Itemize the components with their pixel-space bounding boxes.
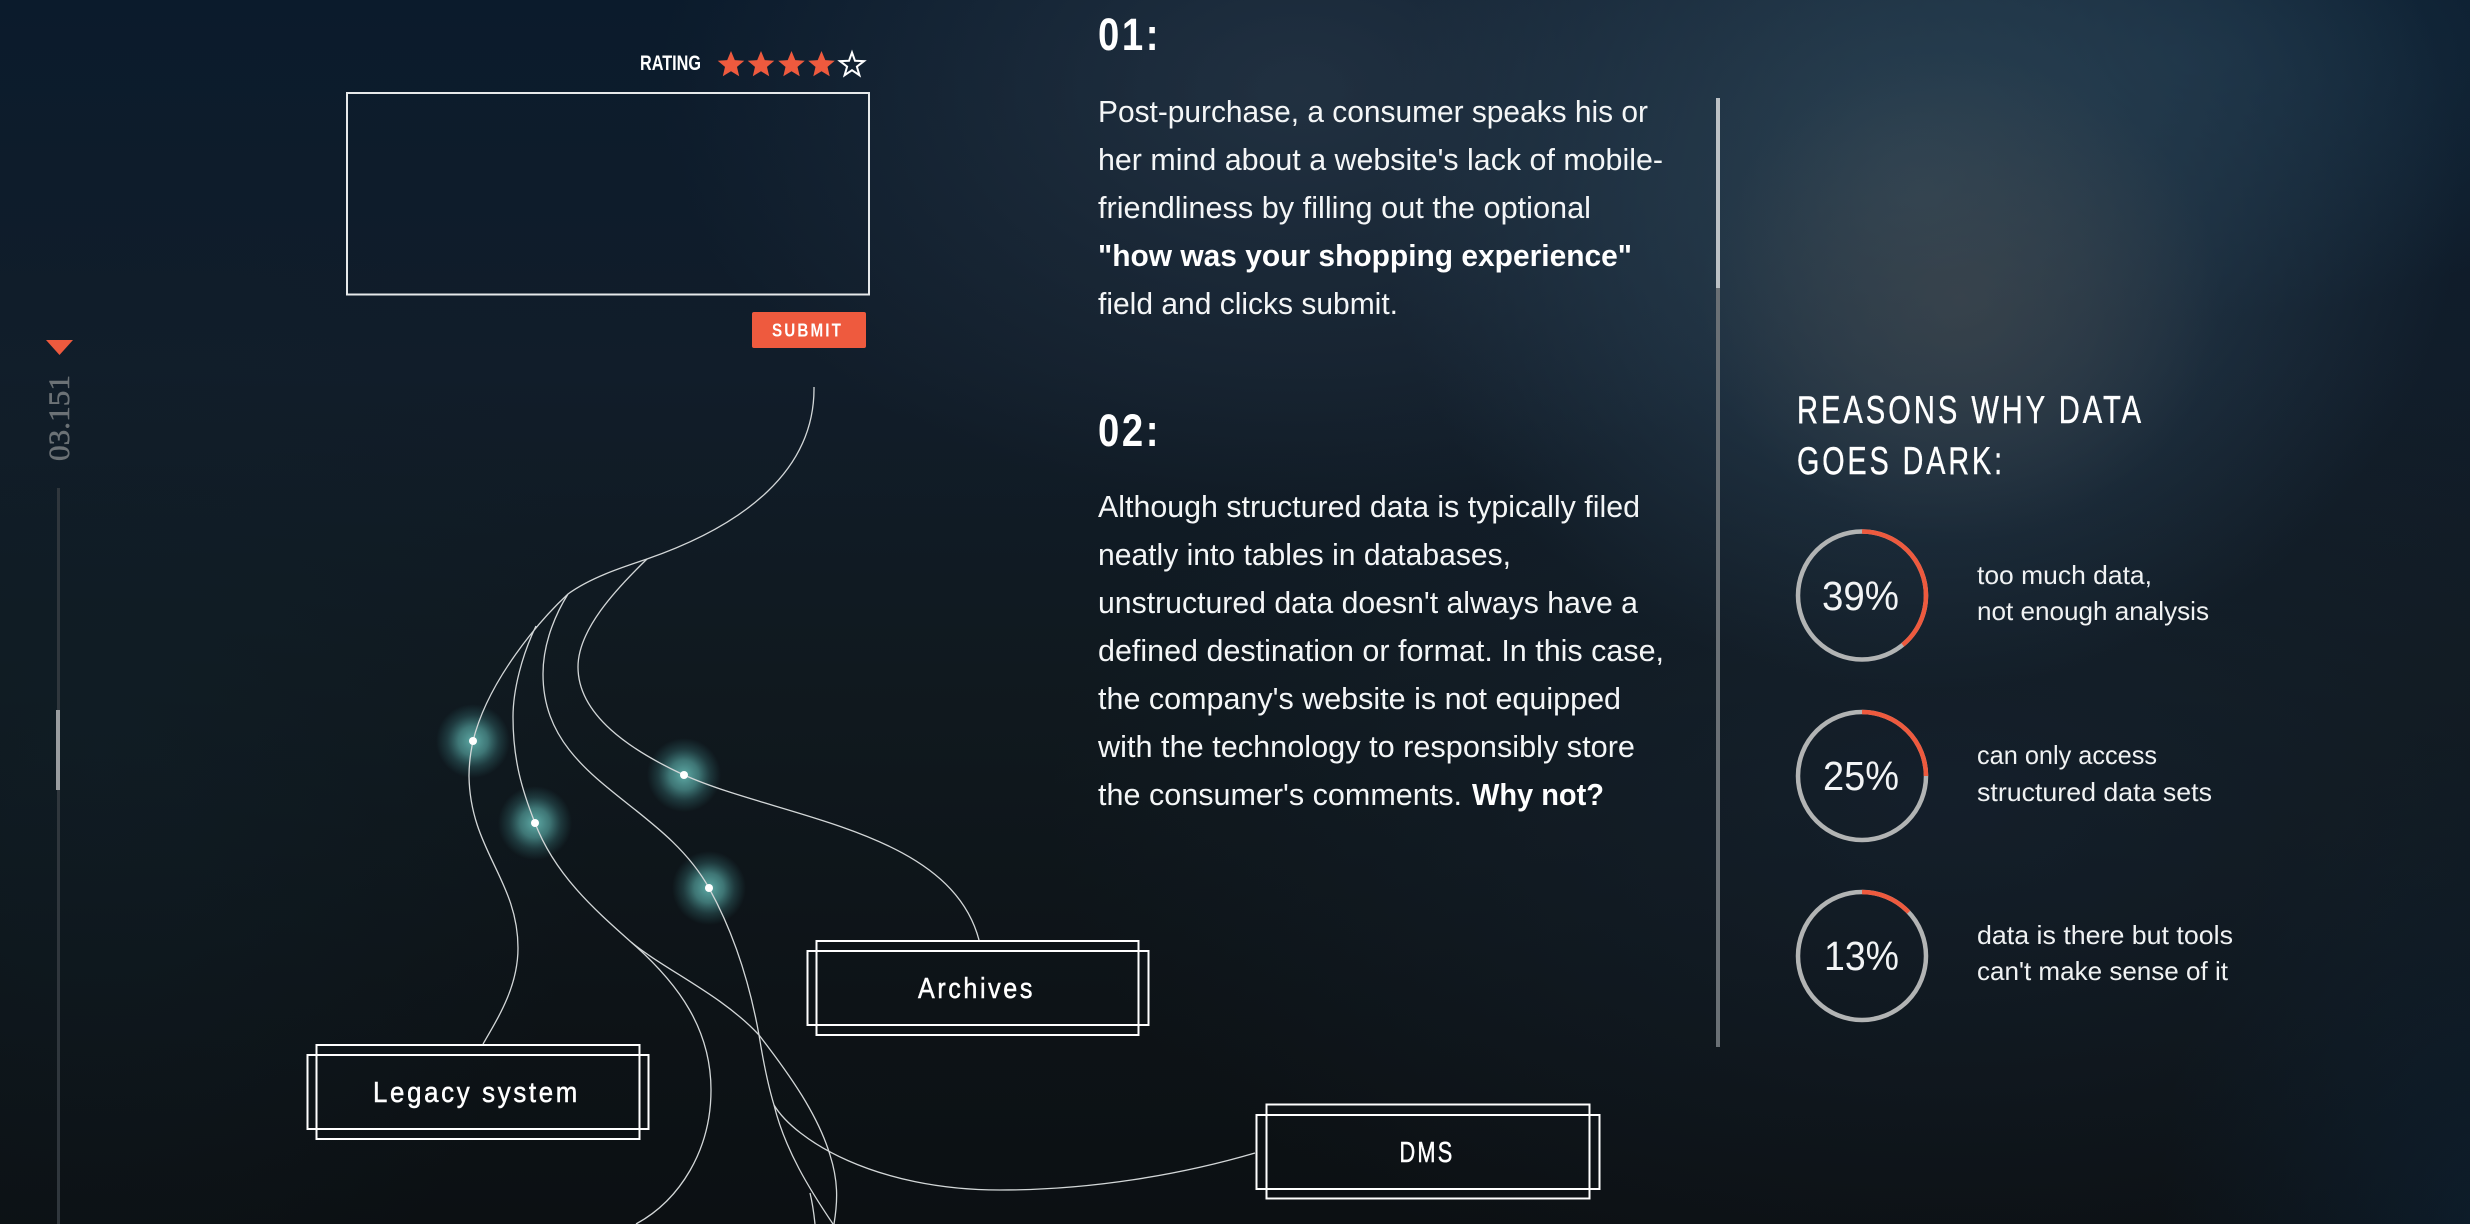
paragraph 02: the consumer's comments. <box>1098 777 1462 812</box>
icon: orange triangle marker <box>46 340 73 355</box>
label: tools can't make sense: data is there but tools <box>1977 920 2233 950</box>
reasons heading: REASONS WHY DATA <box>1797 389 2144 432</box>
submit button <box>752 312 866 348</box>
paragraph 01: field and clicks submit. <box>1098 286 1398 321</box>
paragraph 02: neatly into tables in databases, <box>1098 537 1511 572</box>
paragraph 01: friendliness by filling out the optional <box>1098 190 1591 225</box>
paragraph 02: with the technology to responsibly store <box>1097 729 1635 764</box>
label: structured data sets: can only access <box>1977 740 2157 770</box>
scroll track <box>57 488 60 1224</box>
label: too much data: not enough analysis <box>1977 596 2209 626</box>
chart: 13%: 13% <box>1824 933 1899 979</box>
chart: 25%: 25% <box>1823 753 1899 799</box>
heading 01: 01: <box>1098 9 1161 60</box>
scroll thumb <box>56 710 60 790</box>
label: structured data sets: structured data sets <box>1977 777 2212 807</box>
reasons heading: GOES DARK: <box>1797 440 2005 483</box>
box: Archives: Archives <box>918 973 1035 1005</box>
paragraph 02: Although structured data is typically filed <box>1098 489 1640 524</box>
step 02 <box>1097 405 1664 812</box>
label: tools can't make sense <box>1977 920 2233 986</box>
box: DMS <box>1256 1104 1600 1198</box>
label: structured data sets <box>1977 740 2212 807</box>
vertical divider <box>1716 98 1720 1047</box>
label: too much data: too much data, <box>1977 560 2152 590</box>
paragraph 01 <box>1098 94 1663 321</box>
rating row <box>640 51 864 76</box>
submit button: SUBMIT <box>772 320 843 340</box>
chart: 39% <box>1798 532 1926 660</box>
box: Legacy system <box>308 1045 648 1139</box>
paragraph 01: her mind about a website's lack of mobile- <box>1098 142 1663 177</box>
feedback form box <box>347 93 869 294</box>
scroll indicator <box>43 340 76 1224</box>
node dots <box>469 737 713 892</box>
paragraph 02: the company's website is not equipped <box>1098 681 1621 716</box>
paragraph 01: Post-purchase, a consumer speaks his or <box>1098 94 1648 129</box>
paragraph 02: unstructured data doesn't always have a <box>1098 585 1639 620</box>
label: tools can't make sense: can't make sense of it <box>1977 956 2229 986</box>
rating label: RATING <box>640 52 701 75</box>
label: too much data <box>1977 560 2209 626</box>
chart: 39%: 39% <box>1822 573 1899 619</box>
box: Archives <box>808 941 1148 1035</box>
chart: 13% <box>1798 892 1926 1020</box>
icon: rating stars <box>718 51 864 76</box>
scroll position number: 03.151 <box>43 375 76 461</box>
box: Legacy system: Legacy system <box>373 1077 580 1109</box>
reasons heading <box>1797 389 2144 483</box>
step 01 <box>1098 9 1663 321</box>
paragraph 02: Why not? <box>1472 777 1604 812</box>
flow lines <box>469 387 1255 1224</box>
box: DMS: DMS <box>1400 1137 1454 1169</box>
panel: reasons why data goes dark <box>1797 389 2233 1020</box>
paragraph 02 <box>1097 489 1664 812</box>
heading 02: 02: <box>1098 405 1161 456</box>
paragraph 02: defined destination or format. In this case, <box>1098 633 1664 668</box>
glowing nodes <box>436 704 746 925</box>
chart: 25% <box>1798 712 1926 840</box>
paragraph 01: "how was your shopping experience" <box>1098 238 1632 273</box>
